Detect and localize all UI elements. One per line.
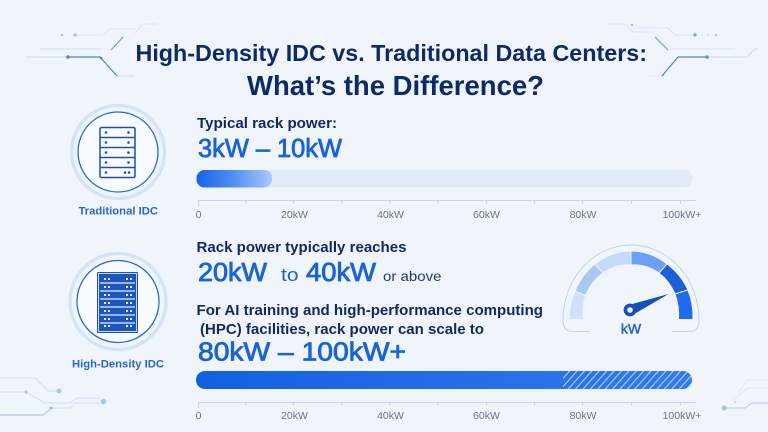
- axis: traditional scale: 0: [196, 209, 202, 221]
- axis: traditional scale: 80kW: [570, 209, 597, 221]
- text block: rack power typically reaches: or above: [383, 268, 442, 284]
- icon: dense server rack: [97, 272, 138, 333]
- decoration: top-right circuit lines: [608, 24, 758, 76]
- bar chart: traditional rack power: [196, 170, 701, 221]
- axis: traditional scale: 100kW+: [663, 209, 701, 221]
- text block: typical rack power: 3kW – 10kW: [198, 135, 342, 163]
- decoration: top-left circuit lines: [25, 24, 157, 76]
- axis: high-density scale: 100kW+: [663, 410, 701, 422]
- decoration: bottom-right circuit lines: [722, 380, 768, 410]
- text block: rack power typically reaches: [196, 239, 442, 287]
- axis: high-density scale: 40kW: [377, 410, 404, 422]
- gauge needle: [625, 294, 668, 315]
- axis: traditional scale: 60kW: [473, 209, 500, 221]
- axis: high-density scale: 20kW: [281, 410, 308, 422]
- text block: AI and HPC rack power: For AI training and high-performance computing: [196, 302, 543, 319]
- text block: typical rack power: Typical rack power:: [197, 115, 337, 132]
- text block: rack power typically reaches: 40kW: [306, 259, 376, 287]
- axis: high-density scale: 0: [196, 410, 202, 422]
- text block: AI and HPC rack power: [196, 302, 543, 366]
- bar chart: high-density rack power: [196, 371, 701, 422]
- gauge unit: kW: [621, 320, 642, 336]
- axis: traditional scale: 40kW: [377, 209, 404, 221]
- axis: high-density scale: 60kW: [473, 410, 500, 422]
- panel: traditional IDC icon: [72, 106, 164, 218]
- axis: high-density scale: 80kW: [570, 410, 597, 422]
- title: High-Density IDC vs. Traditional Data Centers:: [136, 40, 647, 66]
- text block: AI and HPC rack power: 80kW – 100kW+: [198, 338, 406, 366]
- axis: traditional scale: 20kW: [281, 209, 308, 221]
- title: [136, 40, 647, 101]
- text block: rack power typically reaches: to: [281, 265, 298, 285]
- label: Traditional IDC: Traditional IDC: [78, 206, 158, 218]
- text block: rack power typically reaches: Rack power typically reaches: [196, 239, 406, 256]
- text block: rack power typically reaches: 20kW: [198, 259, 267, 287]
- text block: typical rack power: [197, 115, 342, 163]
- decoration: bottom-left circuit lines: [0, 378, 106, 415]
- axis: high-density scale: [196, 402, 701, 422]
- hatched overlay: 80kW to 100kW+: [563, 371, 693, 389]
- gauge segments: [569, 251, 693, 320]
- text block: AI and HPC rack power: (HPC) facilities, rack power can scale to: [200, 321, 484, 338]
- panel: high-density IDC icon: [70, 254, 166, 370]
- label: High-Density IDC: High-Density IDC: [72, 358, 164, 370]
- gauge: kW meter: [563, 245, 699, 336]
- axis: traditional scale: [196, 200, 701, 221]
- icon: server rack outline: [100, 128, 135, 178]
- title: What’s the Difference?: [247, 70, 544, 101]
